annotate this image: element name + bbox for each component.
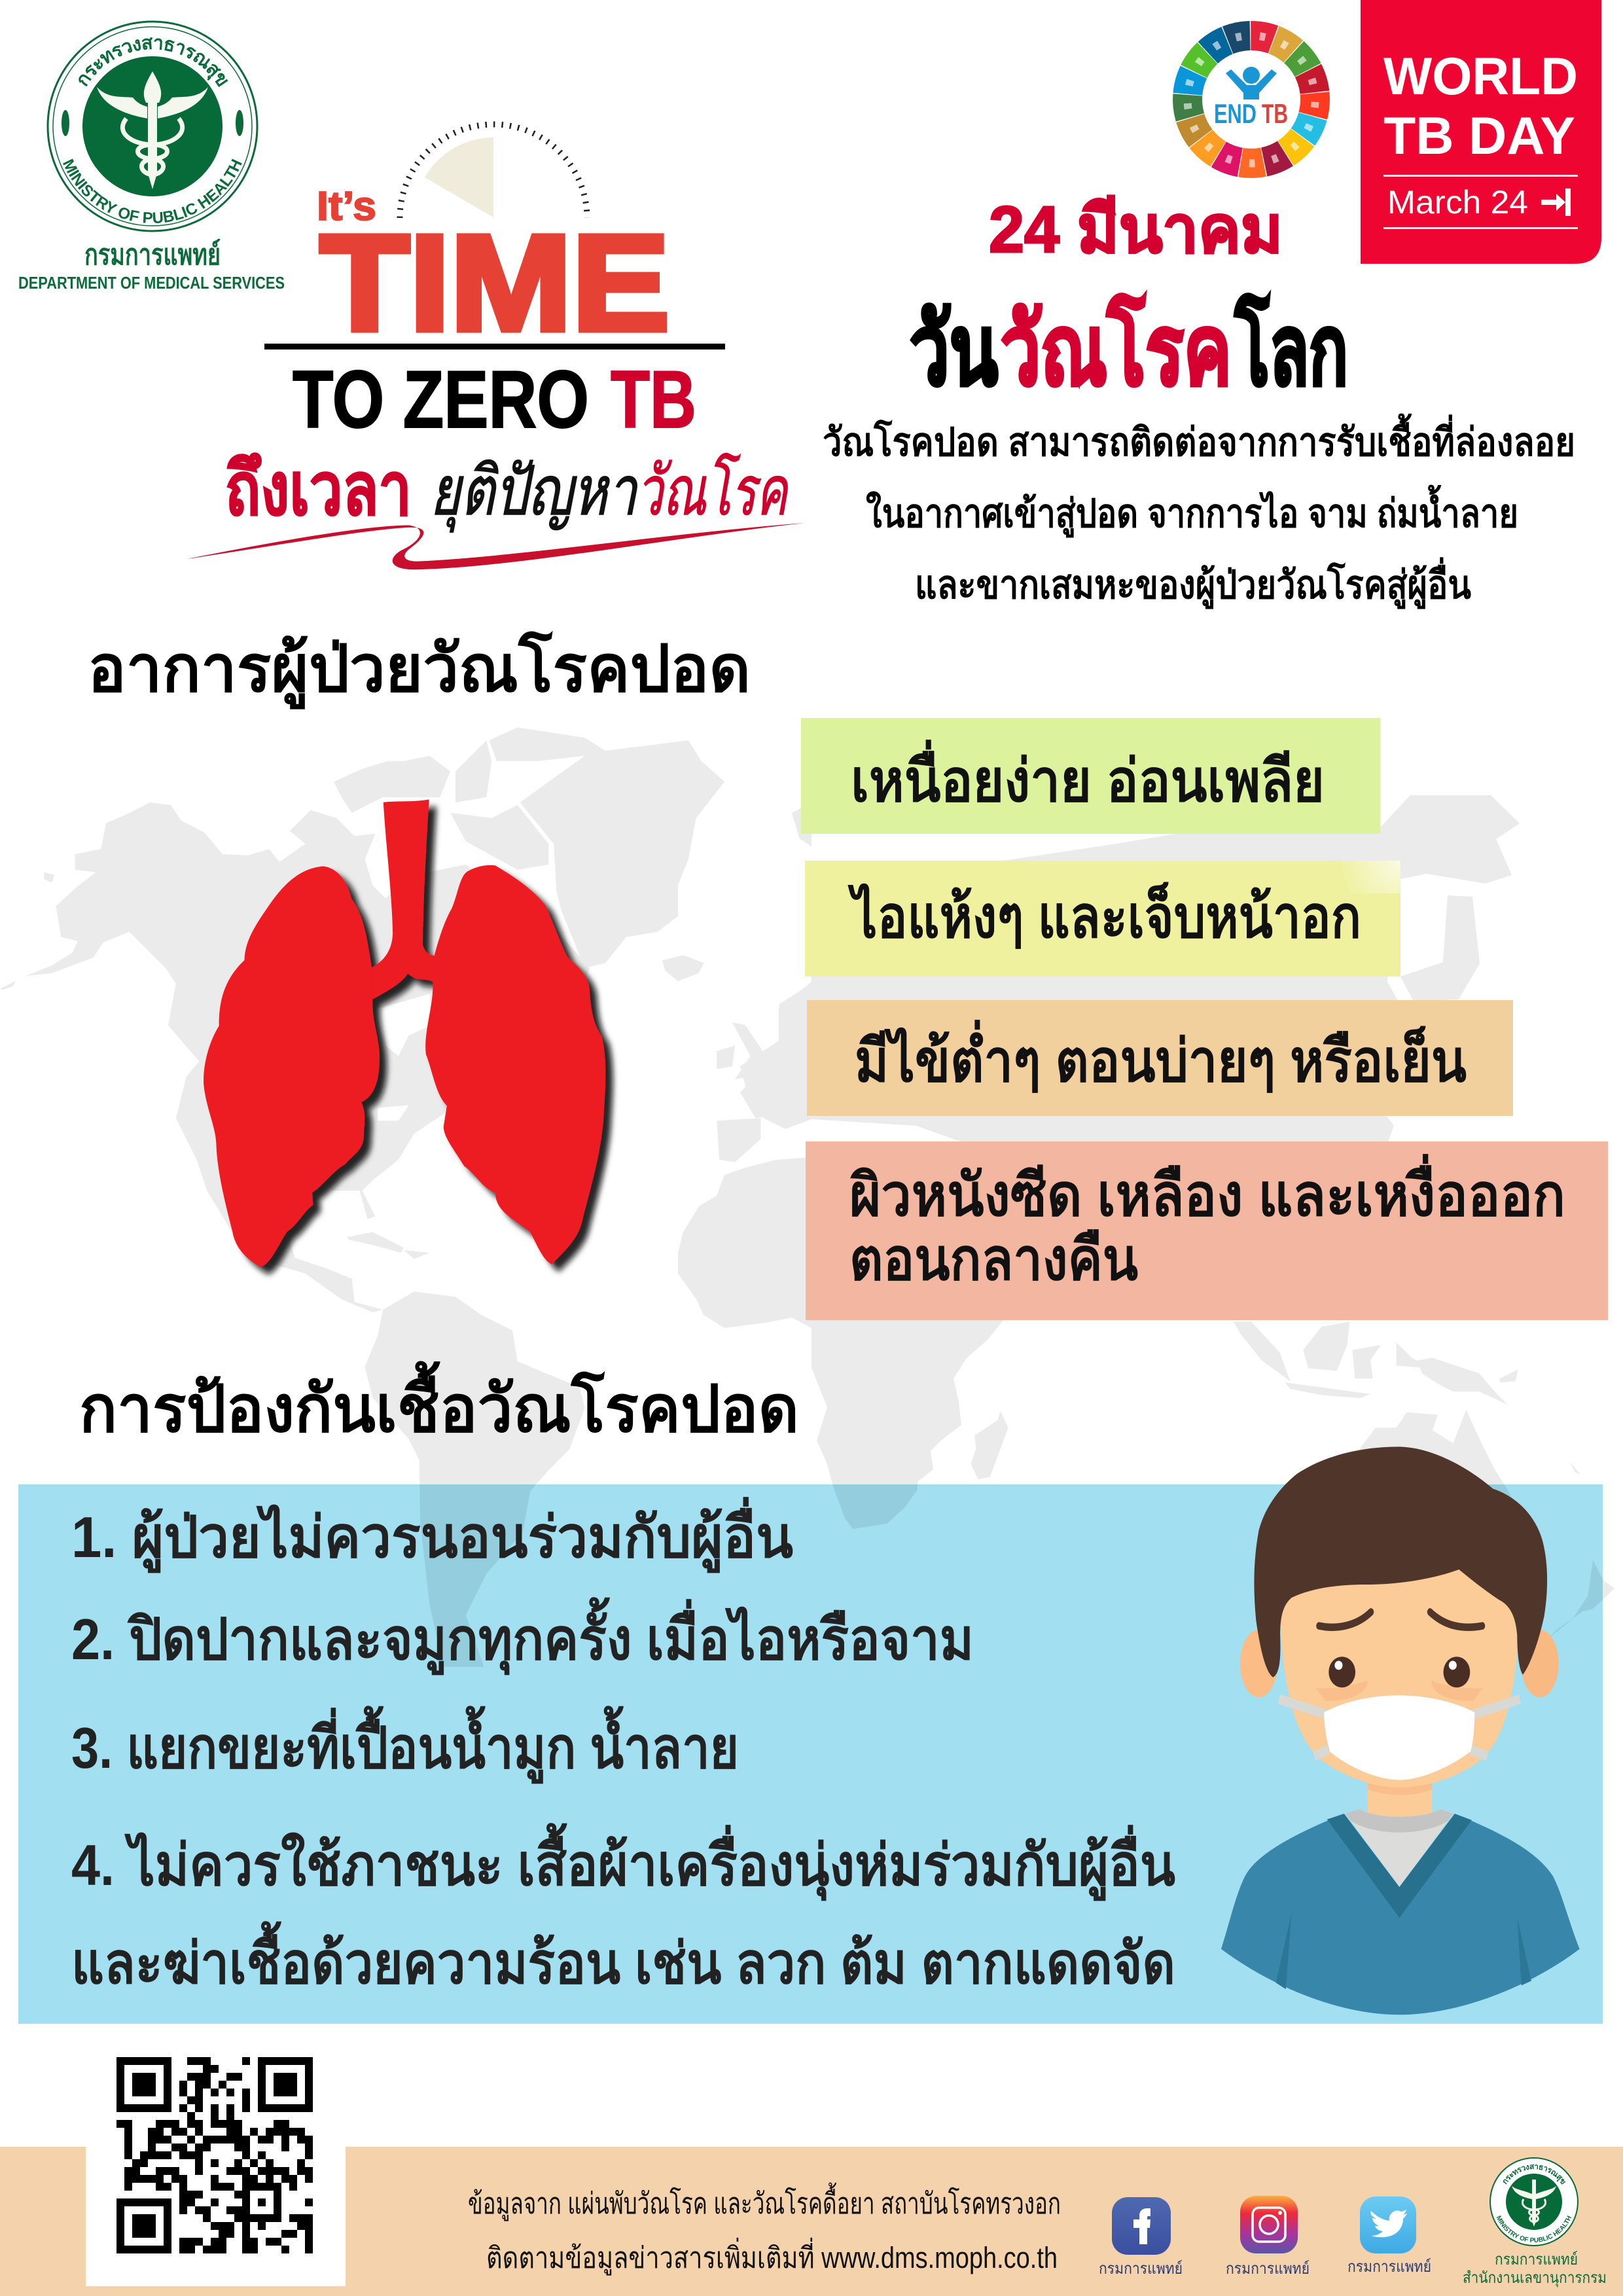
source and contact text: ติดตามข้อมูลข่าวสารเพิ่มเติมที่ www.dms.moph.co.th xyxy=(486,2237,1058,2276)
intro text: และขากเสมหะของผู้ป่วยวัณโรคสู่ผู้อื่น xyxy=(915,557,1471,609)
symptom box: dry cough xyxy=(805,861,1400,977)
World TB Day Thai title: โลก xyxy=(1234,293,1348,405)
End TB wheel xyxy=(1161,9,1342,190)
heading: symptoms: อาการผู้ป่วยวัณโรคปอด xyxy=(88,630,751,709)
QR code xyxy=(86,2042,346,2286)
footer band xyxy=(0,2147,1623,2296)
item 4: 4. ไม่ควรใช้ภาชนะ เสื้อผ้าเครื่องนุ่งห่มร่วมกับผู้อื่น xyxy=(71,1823,1175,1901)
department name xyxy=(18,238,285,293)
End TB wheel: END xyxy=(1214,98,1257,129)
intro text xyxy=(823,413,1575,609)
small logo: Ministry of Public Health: กรมการแพทย์ xyxy=(1495,2250,1578,2269)
Thai slogan xyxy=(225,448,789,533)
logo: Ministry of Public Health: MINISTRY OF PUBLIC HEALTH xyxy=(63,158,242,223)
symptom box: dry cough: ไอแห้งๆ และเจ็บหน้าอก xyxy=(847,881,1361,950)
item 4: และฆ่าเชื้อด้วยความร้อน เช่น ลวก ต้ม ตากแดดจัด xyxy=(71,1921,1175,1996)
icon: instagram xyxy=(1226,2196,1310,2278)
symptom box: pale skin and night sweats xyxy=(806,1141,1608,1320)
World TB Day badge xyxy=(1361,0,1601,264)
TO ZERO TB: TB xyxy=(611,355,696,445)
icon: facebook: กรมการแพทย์ xyxy=(1099,2259,1183,2278)
logo: Ministry of Public Health xyxy=(47,21,258,232)
rule xyxy=(264,344,725,350)
icon: twitter xyxy=(1347,2197,1431,2276)
intro text: ในอากาศเข้าสู่ปอด จากการไอ จาม ถ่มน้ำลาย xyxy=(866,484,1518,538)
small logo: Ministry of Public Health: กระทรวงสาธารณสุข xyxy=(1503,2164,1565,2185)
symptom box: fatigue xyxy=(801,718,1380,834)
campaign logo: It's Time to Zero TB xyxy=(187,124,805,569)
department name: DEPARTMENT OF MEDICAL SERVICES xyxy=(18,273,285,293)
icon: lungs xyxy=(204,800,605,1267)
item 4 xyxy=(71,1823,1175,1996)
small logo: Ministry of Public Health xyxy=(1463,2157,1607,2287)
swoosh xyxy=(187,523,805,569)
small logo: Ministry of Public Health: MINISTRY OF PUBLIC HEALTH xyxy=(1496,2215,1572,2242)
background world map xyxy=(0,727,1614,1667)
logo: Ministry of Public Health: กระทรวงสาธารณสุข xyxy=(79,37,228,88)
department name: กรมการแพทย์ xyxy=(84,238,221,271)
item 1: 1. ผู้ป่วยไม่ควรนอนร่วมกับผู้อื่น xyxy=(71,1497,793,1573)
item 2: 2. ปิดปากและจมูกทุกครั้ง เมื่อไอหรือจาม xyxy=(71,1597,974,1676)
It's: It’s xyxy=(317,184,376,229)
panel: prevention list xyxy=(18,1484,1603,2024)
symptom box: low fever xyxy=(807,1000,1513,1116)
illustration: man wearing mask xyxy=(1221,1446,1580,2015)
TIME: TIME xyxy=(320,207,669,359)
icon: facebook xyxy=(1099,2197,1183,2278)
symptom box: low fever: มีไข้ต่ำๆ ตอนบ่ายๆ หรือเย็น xyxy=(855,1020,1467,1094)
source and contact text: ข้อมูลจาก แผ่นพับวัณโรค และวัณโรคดื้อยา สถาบันโรคทรวงอก xyxy=(468,2182,1061,2221)
World TB Day Thai title: วัณโรค xyxy=(1001,293,1232,405)
dial xyxy=(400,124,587,218)
date: 24 March: 24 มีนาคม xyxy=(989,193,1283,266)
World TB Day badge: TB DAY xyxy=(1383,107,1575,166)
Thai slogan: ยุติปัญหา xyxy=(430,454,639,533)
icon: instagram: กรมการแพทย์ xyxy=(1226,2259,1310,2278)
symptom box: fatigue: เหนื่อยง่าย อ่อนเพลีย xyxy=(851,740,1325,814)
World TB Day badge: March 24 xyxy=(1387,184,1528,221)
item 3: 3. แยกขยะที่เปื้อนน้ำมูก น้ำลาย xyxy=(71,1706,739,1784)
World TB Day Thai title: วัน xyxy=(910,295,998,405)
Thai slogan: ถึงเวลา xyxy=(225,448,412,530)
source and contact text xyxy=(468,2182,1061,2276)
TO ZERO TB: TO ZERO xyxy=(293,355,589,445)
End TB wheel: TB xyxy=(1262,98,1288,129)
Thai slogan: วัณโรค xyxy=(637,453,789,529)
World TB Day badge: WORLD xyxy=(1383,47,1578,106)
heading: prevention: การป้องกันเชื้อวัณโรคปอด xyxy=(79,1361,799,1446)
symptom box: pale skin and night sweats: ผิวหนังซีด เหลือง และเหงื่อออก xyxy=(849,1154,1565,1229)
icon: twitter: กรมการแพทย์ xyxy=(1347,2257,1431,2276)
symptom box: pale skin and night sweats: ตอนกลางคืน xyxy=(849,1227,1138,1293)
